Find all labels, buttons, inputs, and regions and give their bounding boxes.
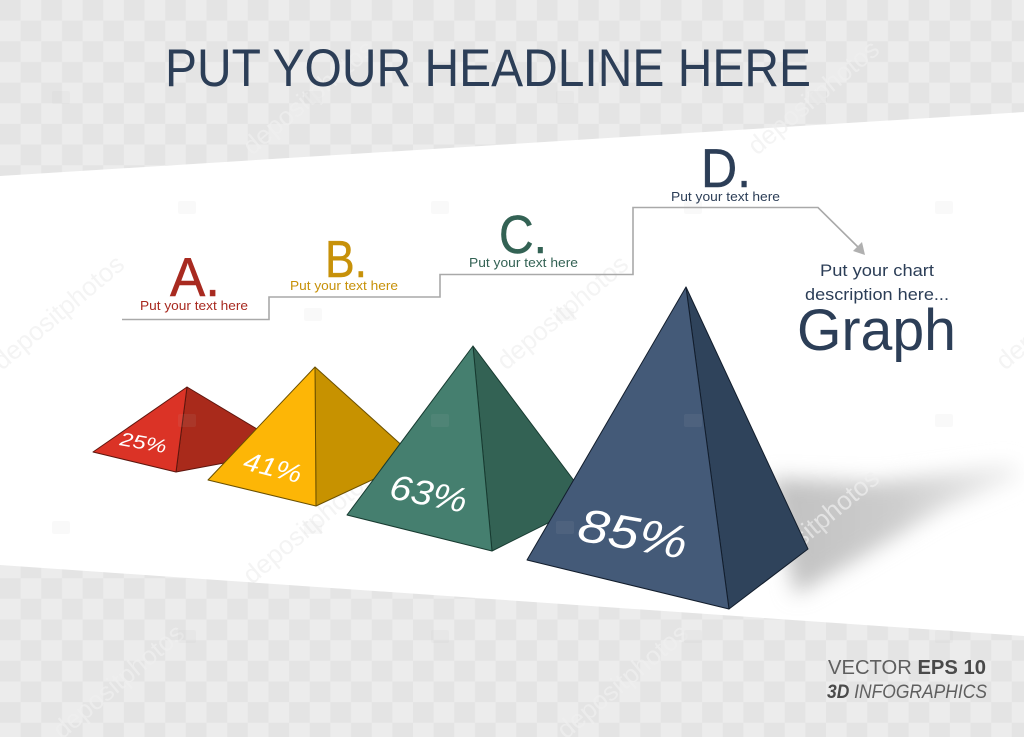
watermark: depositphotos — [742, 34, 885, 161]
step C label: C. — [499, 205, 547, 265]
step B label: B. — [325, 231, 367, 289]
pyramid C green 63% — [347, 346, 590, 551]
step A label — [140, 246, 248, 313]
step C label — [469, 205, 578, 270]
step C label: Put your text here — [469, 255, 578, 270]
step D label: Put your text here — [671, 189, 780, 204]
pyramid A red 25%: 25% — [117, 429, 168, 458]
step A label: A. — [170, 246, 220, 308]
watermark: depositphotos — [742, 463, 885, 590]
pyramid A red 25% — [93, 387, 262, 472]
step B label: Put your text here — [290, 278, 398, 293]
vector badge: VECTOR EPS 10 — [828, 657, 986, 679]
step B label — [290, 231, 398, 293]
pyramid shadow — [770, 464, 1022, 595]
pyramid B yellow 41%: 41% — [241, 446, 305, 489]
chart description — [797, 261, 956, 363]
step D label — [671, 137, 780, 204]
watermark camera icons — [52, 91, 953, 643]
vector badge: 3D INFOGRAPHICS — [827, 682, 987, 703]
vector badge — [827, 657, 987, 703]
watermark: depositphotos — [491, 249, 634, 376]
white slanted band — [0, 112, 1024, 636]
pyramid B yellow 41% — [208, 367, 417, 506]
chart description: description here... — [805, 285, 949, 304]
chart description: Put your chart — [820, 261, 934, 280]
step A label: Put your text here — [140, 298, 248, 313]
step D label: D. — [701, 137, 751, 199]
title: PUT YOUR HEADLINE HERE — [165, 39, 811, 98]
pyramid C green 63%: 63% — [386, 468, 470, 521]
chart description: Graph — [797, 298, 956, 363]
watermark: depositphotos — [237, 34, 380, 161]
pyramid D blue 85% — [527, 287, 808, 609]
watermark: depositphotos — [237, 463, 380, 590]
pyramid D blue 85%: 85% — [574, 498, 692, 569]
stepped line with arrow — [122, 208, 865, 320]
